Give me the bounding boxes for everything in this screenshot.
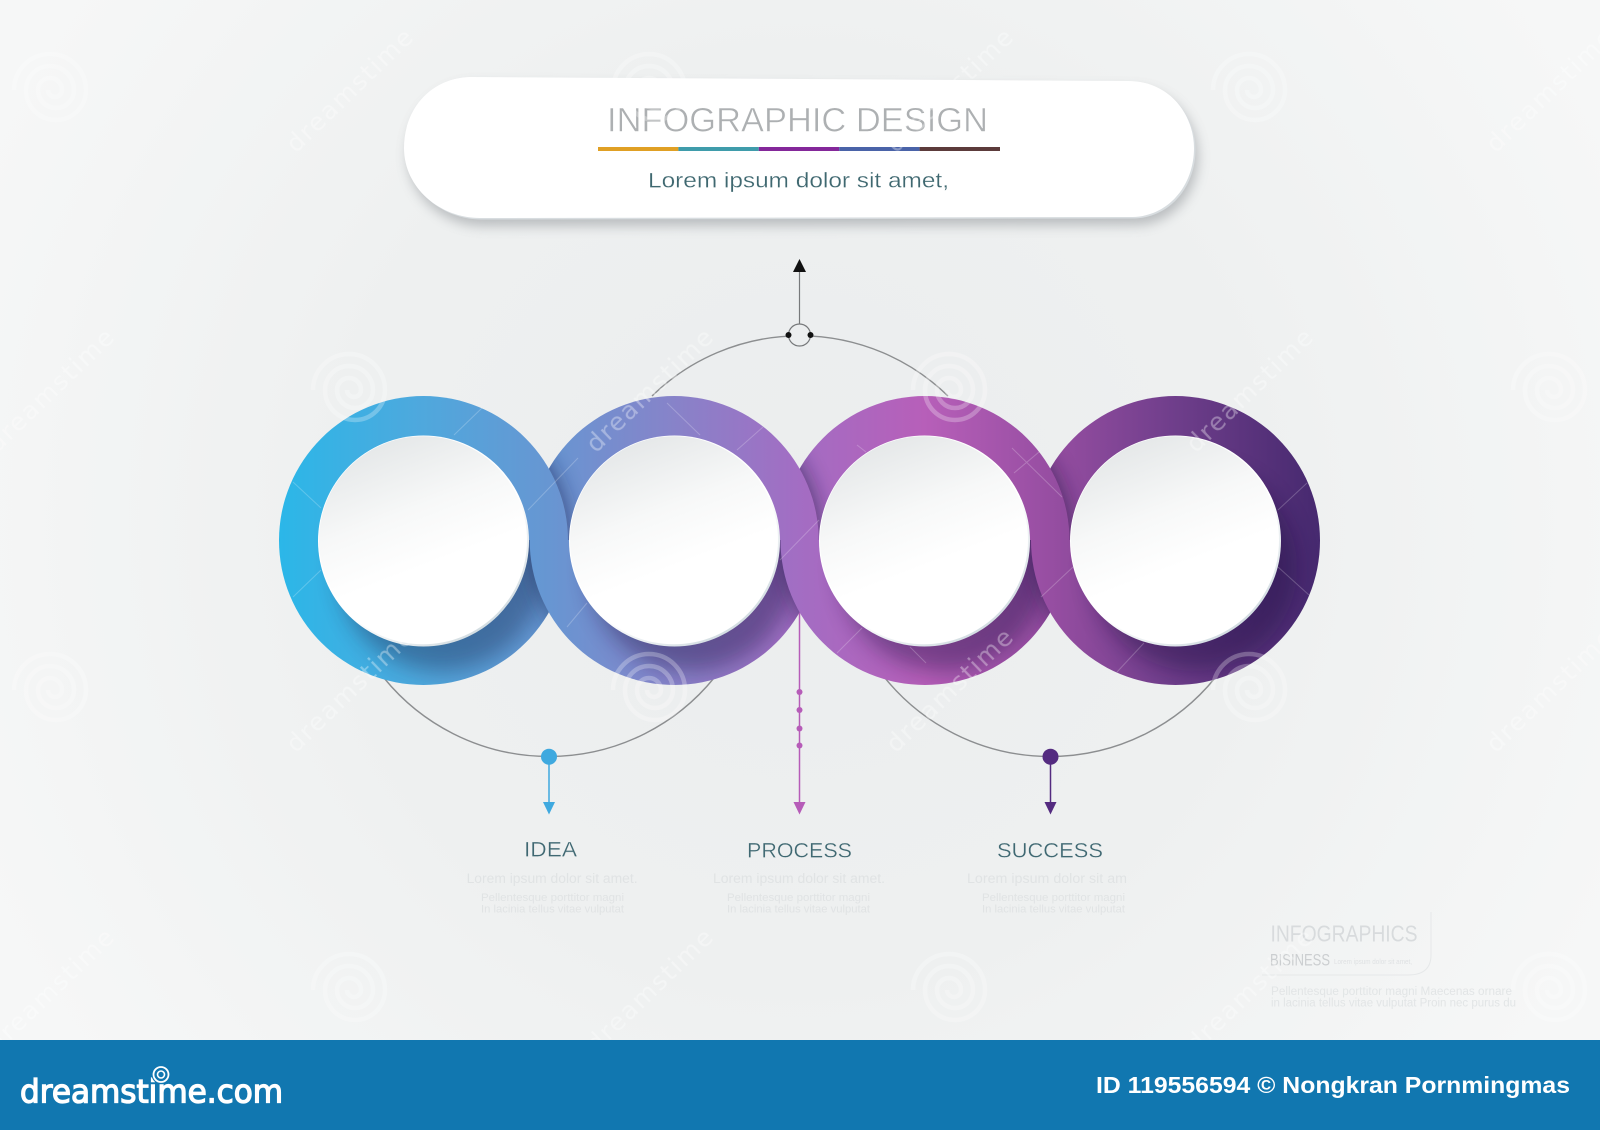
idea connector arc and arrow [384, 678, 714, 814]
footer brand name: dreamstime.com [20, 1072, 283, 1110]
watermark layer: dreamstime [1180, 923, 1319, 1058]
process connector line and arrow [794, 610, 806, 814]
idea text block: IDEA [524, 838, 577, 862]
faint infographics business label: INFOGRAPHICS [1270, 920, 1418, 946]
faint infographics business label: Pellentesque porttitor magni Maecenas ornare [1271, 986, 1512, 998]
watermark layer: dreamstime [580, 323, 719, 458]
title text: INFOGRAPHIC DESIGN [607, 102, 988, 140]
success text block [967, 840, 1127, 916]
idea text block: Pellentesque porttitor magni [481, 892, 624, 904]
process text block: Pellentesque porttitor magni [727, 892, 870, 904]
woven ribbon of four rings [278, 394, 1322, 686]
watermark layer: dreamstime [880, 23, 1019, 158]
watermark layer: dreamstime [280, 623, 419, 758]
top connector arc with arrow [652, 259, 948, 396]
success text block: Pellentesque porttitor magni [982, 892, 1125, 904]
white disc 1 [318, 436, 529, 646]
icon: footer spiral logo [152, 1065, 170, 1084]
title card [404, 77, 1198, 226]
idea text block [467, 838, 638, 916]
watermark layer: dreamstime [880, 623, 1019, 758]
subtitle: Lorem ipsum dolor sit amet, [648, 170, 949, 192]
process text block: Lorem ipsum dolor sit amet. [713, 871, 885, 886]
white disc 3 [819, 436, 1030, 646]
faint infographics business label [1262, 912, 1516, 1010]
success text block: SUCCESS [997, 840, 1103, 862]
colour stripe [598, 147, 1000, 151]
watermark layer: dreamstime [280, 23, 419, 158]
process text block: In lacinia tellus vitae vulputat [727, 904, 870, 916]
white disc 4 [1070, 436, 1281, 646]
watermark layer: dreamstime [580, 923, 719, 1058]
success text block: Lorem ipsum dolor sit am [967, 871, 1127, 886]
process text block: PROCESS [747, 840, 852, 862]
process text block [713, 840, 885, 916]
footer banner [0, 1040, 1600, 1130]
faint infographics business label: BISINESS [1270, 950, 1330, 970]
footer credit: ID 119556594 © Nongkran Pornmingmas [1096, 1072, 1570, 1098]
faint infographics business label: Lorem ipsum dolor sit amet, [1334, 959, 1412, 966]
white disc 2 [569, 436, 780, 646]
success text block: In lacinia tellus vitae vulputat [982, 904, 1125, 916]
watermark layer: dreamstime [1180, 323, 1319, 458]
idea text block: In lacinia tellus vitae vulputat [481, 904, 624, 916]
faint infographics business label: in lacinia tellus vitae vulputat Proin nec purus du [1271, 998, 1516, 1010]
success connector arc and arrow [885, 678, 1215, 814]
idea text block: Lorem ipsum dolor sit amet. [467, 871, 638, 886]
